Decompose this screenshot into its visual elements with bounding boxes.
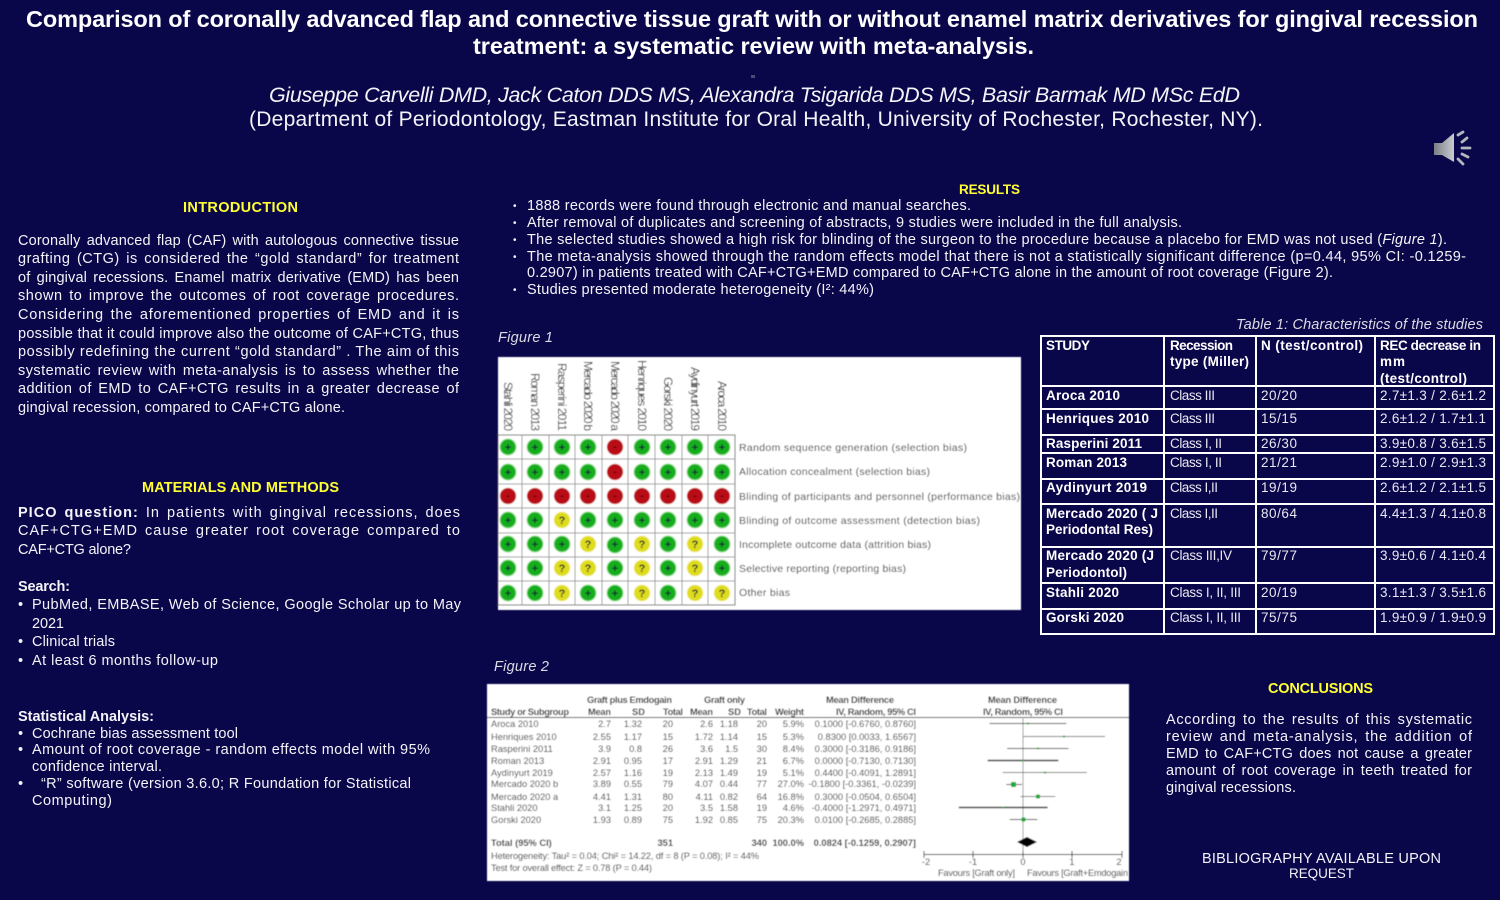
bias domain labels: Random sequence generation (selection bias) — [739, 442, 967, 454]
text block: introduction body: of gingival recessions. Enamel matrix derivative (EMD) has been — [18, 270, 459, 286]
forest plot study rows: 4.07 — [695, 779, 713, 789]
forest plot graphic: 2 — [1116, 857, 1122, 867]
text block: statistical analysis: Amount of root coverage - random effects model with 95% — [32, 742, 430, 758]
forest plot study rows: 2.7 — [598, 719, 611, 729]
forest plot study rows: 5.3% — [783, 732, 804, 742]
forest plot total row: Heterogeneity: Tau² = 0.04; Chi² = 14.22, df = 8 (P = 0.08); I² = 44% — [491, 851, 759, 861]
forest plot study rows: 19 — [663, 768, 673, 778]
risk of bias dots: ??? — [585, 539, 699, 551]
study column labels: Aydinyurt 2019 — [688, 367, 702, 431]
table column: study: Rasperini 2011 — [1046, 436, 1142, 451]
table column: REC decrease: 3.9±0.8 / 3.6±1.5 — [1380, 436, 1486, 451]
forest plot study rows: Mercado 2020 a — [491, 792, 559, 802]
forest plot study rows: 21 — [757, 756, 767, 766]
table column: study: Roman 2013 — [1046, 455, 1127, 470]
text block: introduction body: addition of EMD to CAF+CTG results in a greater decrease of — [18, 381, 460, 397]
text block: statistical analysis — [18, 709, 430, 809]
forest plot study rows: 2.91 — [695, 756, 713, 766]
text block: results bullets: Studies presented moderate heterogeneity (I²: 44%) — [527, 282, 874, 298]
risk of bias dots: ???? — [559, 588, 726, 600]
forest plot study rows: 1.31 — [624, 792, 642, 802]
text block: introduction body: grafting (CTG) is considered the “gold standard” for treatment — [18, 251, 459, 267]
forest plot study rows: 1.58 — [720, 803, 738, 813]
forest plot table headers: IV, Random, 95% CI — [836, 707, 916, 717]
forest plot table headers: Graft only — [704, 695, 746, 705]
risk of bias dots — [500, 439, 730, 601]
forest plot study rows: 0.44 — [720, 779, 738, 789]
text block: conclusions body: amount of root coverage in teeth treated for — [1166, 763, 1472, 779]
text block: results bullets: 1888 records were found through electronic and manual searches. — [527, 198, 971, 214]
forest plot study rows: 0.1000 [-0.6760, 0.8760] — [815, 719, 916, 729]
bibliography note: BIBLIOGRAPHY AVAILABLE UPON — [1202, 851, 1441, 867]
text block: results bullets: • — [513, 285, 517, 296]
forest plot total row: Test for overall effect: Z = 0.78 (P = 0.44) — [491, 863, 652, 873]
forest plot study rows: 4.41 — [593, 792, 611, 802]
forest plot study rows: 0.8 — [629, 744, 642, 754]
study column labels: Gorski 2020 — [661, 377, 675, 431]
text block: statistical analysis: • — [18, 776, 23, 792]
table column: REC decrease — [1380, 338, 1486, 625]
forest plot study rows: 2.6 — [700, 719, 713, 729]
forest plot study rows: 27.0% — [778, 779, 804, 789]
table column: recession type — [1170, 338, 1249, 625]
forest plot table headers: Mean — [690, 707, 713, 717]
forest plot study rows: Henriques 2010 — [491, 732, 557, 742]
forest plot study rows: 0.0000 [-0.7130, 0.7130] — [815, 756, 916, 766]
table column: REC decrease: 2.6±1.2 / 2.1±1.5 — [1380, 480, 1486, 495]
bias domain labels — [739, 442, 1020, 599]
forest plot study rows: 20 — [757, 719, 767, 729]
text block: introduction body: systematic review with meta-analysis is to assess whether the — [18, 363, 459, 379]
forest plot study rows: 0.8300 [0.0033, 1.6567] — [818, 732, 916, 742]
bias domain labels: Blinding of outcome assessment (detection bias) — [739, 515, 980, 527]
table column: recession type: Class III — [1170, 388, 1215, 403]
text block: PICO question: CAF+CTG alone? — [18, 542, 131, 558]
forest plot total row: 340 — [751, 838, 767, 848]
study column labels: Rasperini 2011 — [555, 363, 569, 431]
risk of bias dots: ++++++ — [505, 539, 725, 551]
text block: conclusions body: According to the results of this systematic — [1166, 712, 1472, 728]
text block: statistical analysis: “R” software (version 3.6.0; R Foundation for Statistical — [41, 776, 411, 792]
chart: forest plot — [487, 684, 1129, 881]
text block: conclusions body — [1166, 712, 1473, 796]
forest plot study rows: 0.3000 [-0.0504, 0.6504] — [815, 792, 916, 802]
table column: N: 15/15 — [1261, 411, 1297, 426]
forest plot study rows: 3.1 — [598, 803, 611, 813]
study column labels: Mercado 2020 b — [581, 361, 595, 431]
forest plot total row: Total (95% CI) — [491, 838, 552, 848]
bias domain labels: Blinding of participants and personnel (performance bias) — [739, 491, 1020, 503]
forest plot study rows: 20.3% — [778, 815, 804, 825]
text block: introduction body: gingival recession, compared to CAF+CTG alone. — [18, 400, 345, 416]
forest plot study rows: 1.16 — [624, 768, 642, 778]
table column: REC decrease: 3.9±0.6 / 4.1±0.4 — [1380, 548, 1486, 563]
forest plot study rows: 3.9 — [598, 744, 611, 754]
text block: PICO question: PICO question: In patients with gingival recessions, does — [18, 505, 460, 521]
table column: N: N (test/control) — [1261, 338, 1363, 353]
table column: N — [1261, 338, 1363, 625]
study column labels — [501, 360, 729, 431]
forest plot study rows: 3.6 — [700, 744, 713, 754]
table column: N: 75/75 — [1261, 610, 1297, 625]
forest plot total row — [491, 838, 916, 873]
forest plot study rows: 0.85 — [720, 815, 738, 825]
forest plot study rows: Rasperini 2011 — [491, 744, 553, 754]
forest plot study rows: Roman 2013 — [491, 756, 544, 766]
risk of bias dots: ++++++++ — [505, 515, 725, 527]
text block: PICO question — [18, 505, 460, 558]
title — [26, 6, 1478, 59]
text block: PICO question: CAF+CTG+EMD cause greater root coverage compared to — [18, 523, 460, 539]
table column: recession type: Recession — [1170, 338, 1233, 353]
panel: introduction — [18, 200, 460, 416]
forest plot study rows: 3.5 — [700, 803, 713, 813]
text block: results bullets: The meta-analysis showed through the random effects model that there is not a statistically significant difference (p=0.44, 95% CI: -0.1259- — [527, 249, 1466, 265]
forest plot study rows: 75 — [757, 815, 767, 825]
table column: study: Stahli 2020 — [1046, 585, 1119, 600]
forest plot study rows: 20 — [663, 803, 673, 813]
text block: search: PubMed, EMBASE, Web of Science, Google Scholar up to May — [32, 597, 462, 613]
table column: REC decrease: REC decrease in — [1380, 338, 1481, 353]
text block: search: Search: — [18, 579, 70, 595]
panel: conclusions — [1166, 681, 1473, 796]
table column: study: STUDY — [1046, 338, 1090, 353]
table column: study: Mercado 2020 (J — [1046, 548, 1154, 563]
table column: recession type: Class I, II, III — [1170, 585, 1241, 600]
forest plot study rows: 75 — [663, 815, 673, 825]
text block: introduction body: possibly redefining the current “gold standard” . The aim of this — [18, 344, 459, 360]
forest plot study rows: 1.14 — [720, 732, 738, 742]
table column: study: Henriques 2010 — [1046, 411, 1149, 426]
table column: REC decrease: 4.4±1.3 / 4.1±0.8 — [1380, 506, 1486, 521]
risk of bias dots: +++++ — [505, 588, 671, 600]
forest plot study rows: 79 — [663, 779, 673, 789]
forest plot study rows: 6.7% — [783, 756, 804, 766]
forest plot study rows: 1.25 — [624, 803, 642, 813]
text block: statistical analysis: Cochrane bias assessment tool — [32, 726, 238, 742]
forest plot graphic: 0 — [1020, 857, 1026, 867]
affiliation: (Department of Periodontology, Eastman Institute for Oral Health, University of Rochester, Rochester, NY). — [249, 108, 1263, 131]
risk of bias dots: ? — [559, 515, 566, 527]
study column labels: Mercado 2020 a — [608, 361, 622, 431]
forest plot study rows: 1.18 — [720, 719, 738, 729]
forest plot study rows: -0.1800 [-0.3361, -0.0239] — [808, 779, 916, 789]
forest plot graphic: -1 — [969, 857, 977, 867]
forest plot study rows: 16.8% — [778, 792, 804, 802]
forest plot study rows: 2.91 — [593, 756, 611, 766]
forest plot study rows: 1.93 — [593, 815, 611, 825]
table column: study: Mercado 2020 ( J — [1046, 506, 1158, 521]
forest plot study rows: 1.17 — [624, 732, 642, 742]
text block: results bullets — [513, 198, 1466, 298]
bias domain labels: Incomplete outcome data (attrition bias) — [739, 539, 931, 551]
forest plot table headers: Study or Subgroup — [491, 707, 569, 717]
forest plot study rows: 1.49 — [720, 768, 738, 778]
text block: results bullets: The selected studies showed a high risk for blinding of the surgeon to the procedure because a placebo for EMD was not used (Figure 1). — [527, 232, 1447, 248]
table column: study — [1046, 338, 1158, 625]
forest plot table headers: SD — [728, 707, 741, 717]
forest plot study rows: 17 — [663, 756, 673, 766]
text block: introduction body — [18, 233, 460, 416]
text block: results bullets: 0.2907) in patients treated with CAF+CTG+EMD compared to CAF+CTG alone in the amount of root coverage (Figure 2). — [527, 265, 1333, 281]
forest plot study rows: 0.4400 [-0.4091, 1.2891] — [815, 768, 916, 778]
heading: results: RESULTS — [959, 182, 1020, 197]
forest plot study rows: 80 — [663, 792, 673, 802]
panel: results — [513, 182, 1466, 298]
forest plot study rows: Stahli 2020 — [491, 803, 538, 813]
panel: materials and methods — [18, 480, 462, 809]
text block: statistical analysis: • — [18, 726, 23, 742]
chart: risk of bias figure — [498, 357, 1021, 610]
forest plot study rows — [491, 719, 916, 825]
text block: results bullets: After removal of duplicates and screening of abstracts, 9 studies were included in the full analysis. — [527, 215, 1182, 231]
study column labels: Roman 2013 — [528, 373, 542, 431]
forest plot study rows: 3.89 — [593, 779, 611, 789]
text block: search: 2021 — [32, 616, 64, 632]
text block: statistical analysis: • — [18, 742, 23, 758]
text block: introduction body: shown to improve the outcomes of root coverage procedures. — [18, 288, 459, 304]
study column labels: Aroca 2010 — [715, 381, 729, 431]
table column: study: Periodontol) — [1046, 565, 1127, 580]
table column: recession type: Class I,II — [1170, 480, 1218, 495]
forest plot table headers: Graft plus Emdogain — [587, 695, 672, 705]
forest plot study rows: 26 — [663, 744, 673, 754]
table column: study: Gorski 2020 — [1046, 610, 1124, 625]
forest plot table headers: Total — [663, 707, 683, 717]
study column labels: Stahli 2020 — [501, 382, 515, 431]
risk of bias dots: +++++ — [505, 563, 725, 575]
forest plot study rows: 77 — [757, 779, 767, 789]
forest plot study rows: 5.9% — [783, 719, 804, 729]
text block: statistical analysis: Computing) — [32, 793, 112, 809]
table grid — [1041, 336, 1494, 634]
table column: recession type: Class I,II — [1170, 506, 1218, 521]
text block: statistical analysis: confidence interval. — [32, 759, 162, 775]
text block: search: • — [18, 653, 23, 669]
table column: REC decrease: mm — [1380, 354, 1405, 369]
text block: introduction body: Coronally advanced flap (CAF) with autologous connective tissue — [18, 233, 459, 249]
table column: REC decrease: 2.9±1.0 / 2.9±1.3 — [1380, 455, 1486, 470]
risk of bias dots: ???? — [559, 563, 699, 575]
authors: Giuseppe Carvelli DMD, Jack Caton DDS MS, Alexandra Tsigarida DDS MS, Basir Barmak MD MSc EdD — [269, 83, 1240, 107]
forest plot table headers: Total — [747, 707, 767, 717]
text block: conclusions body: EMD to CAF+CTG does not cause a greater — [1166, 746, 1472, 762]
forest plot study rows: 1.5 — [725, 744, 738, 754]
forest plot graphic: Favours [Graft+Emdogain — [1027, 868, 1128, 878]
forest plot graphic: 1 — [1069, 857, 1075, 867]
text block: results bullets: • — [513, 252, 517, 263]
heading: conclusions: CONCLUSIONS — [1268, 681, 1373, 697]
table column: study: Aydinyurt 2019 — [1046, 480, 1147, 495]
text block: results bullets: • — [513, 235, 517, 246]
text block: conclusions body: gingival recessions. — [1166, 780, 1296, 796]
forest plot study rows: Aydinyurt 2019 — [491, 768, 553, 778]
table column: REC decrease: 2.6±1.2 / 1.7±1.1 — [1380, 411, 1486, 426]
title: treatment: a systematic review with meta-analysis. — [473, 33, 1034, 59]
bibliography note — [1202, 851, 1441, 881]
risk of bias dots: - — [613, 441, 617, 453]
table column: N: 20/20 — [1261, 388, 1297, 403]
table column: N: 19/19 — [1261, 480, 1297, 495]
forest plot graphic: Favours [Graft only] — [938, 868, 1015, 878]
forest plot study rows: 0.3000 [-0.3186, 0.9186] — [815, 744, 916, 754]
table column: study: Periodontal Res) — [1046, 522, 1153, 537]
forest plot table headers: SD — [632, 707, 645, 717]
risk of bias dots: ++++++++ — [505, 467, 725, 479]
risk of bias dots: - — [613, 466, 617, 478]
forest plot total row: 100.0% — [772, 838, 805, 848]
forest plot total row: 0.0824 [-0.1259, 0.2907] — [814, 838, 916, 848]
forest plot study rows: Mercado 2020 b — [491, 779, 558, 789]
title: Comparison of coronally advanced flap and connective tissue graft with or without enamel matrix derivatives for gingival recession — [26, 6, 1478, 32]
bias domain labels: Selective reporting (reporting bias) — [739, 563, 906, 575]
forest plot study rows: 2.55 — [593, 732, 611, 742]
forest plot study rows: -0.4000 [-1.2971, 0.4971] — [812, 803, 916, 813]
forest plot study rows: 64 — [757, 792, 767, 802]
text block: search: At least 6 months follow-up — [32, 653, 218, 669]
forest plot study rows: 0.55 — [624, 779, 642, 789]
risk of bias dots: --------- — [506, 490, 724, 502]
forest plot study rows: 2.57 — [593, 768, 611, 778]
caption: table 1: Table 1: Characteristics of the studies — [1236, 317, 1483, 333]
forest plot study rows: 8.4% — [783, 744, 804, 754]
table column: recession type: Class III,IV — [1170, 548, 1232, 563]
forest plot study rows: 1.32 — [624, 719, 642, 729]
forest plot study rows: 4.6% — [783, 803, 804, 813]
forest plot study rows: 1.72 — [695, 732, 713, 742]
text block: introduction body: possible that it could improve also the outcome of CAF+CTG, thus — [18, 326, 459, 342]
forest plot table headers: Mean — [588, 707, 611, 717]
table column: REC decrease: 2.7±1.3 / 2.6±1.2 — [1380, 388, 1486, 403]
text block: statistical analysis: Statistical Analysis: — [18, 709, 154, 725]
text block: introduction body: Considering the aforementioned properties of EMD and it is — [18, 307, 459, 323]
forest plot study rows: 0.0100 [-0.2685, 0.2885] — [815, 815, 916, 825]
forest plot study rows: Gorski 2020 — [491, 815, 541, 825]
table column: recession type: Class III — [1170, 411, 1215, 426]
forest plot table headers — [487, 695, 1129, 718]
table column: REC decrease: 3.1±1.3 / 3.5±1.6 — [1380, 585, 1486, 600]
table column: study: Aroca 2010 — [1046, 388, 1120, 403]
caption: figure 2: Figure 2 — [494, 659, 549, 675]
forest plot table headers: Mean Difference — [826, 695, 894, 705]
bibliography note: REQUEST — [1289, 866, 1354, 881]
forest plot study rows: 19 — [757, 803, 767, 813]
heading: materials and methods: MATERIALS AND METHODS — [142, 480, 339, 496]
table column: recession type: Class I, II — [1170, 436, 1222, 451]
table column: REC decrease: (test/control) — [1380, 371, 1467, 386]
table column: N: 80/64 — [1261, 506, 1297, 521]
caption: figure 1: Figure 1 — [498, 330, 553, 346]
forest plot study rows: 1.29 — [720, 756, 738, 766]
text block: results bullets: • — [513, 218, 517, 229]
forest plot study rows: 4.11 — [696, 792, 713, 802]
table column: recession type: Class I, II, III — [1170, 610, 1241, 625]
forest plot study rows: 0.89 — [624, 815, 642, 825]
forest plot graphic: -2 — [922, 857, 930, 867]
text block: conclusions body: review and meta-analysis, the addition of — [1166, 729, 1473, 745]
forest plot study rows: 0.95 — [624, 756, 642, 766]
forest plot study rows: 20 — [663, 719, 673, 729]
forest plot study rows: 15 — [663, 732, 673, 742]
forest plot study rows: 0.82 — [720, 792, 738, 802]
forest plot study rows: 2.13 — [695, 768, 713, 778]
forest plot table headers: Weight — [775, 707, 804, 717]
forest plot study rows: 30 — [757, 744, 767, 754]
forest plot graphic — [922, 717, 1128, 878]
bias domain labels: Other bias — [739, 587, 790, 599]
table column: N: 79/77 — [1261, 548, 1297, 563]
heading: introduction: INTRODUCTION — [183, 200, 298, 216]
forest plot study rows: 19 — [757, 768, 767, 778]
text block: search: • — [18, 597, 23, 613]
forest plot table headers: Mean Difference — [988, 695, 1057, 705]
text block: search: Clinical trials — [32, 634, 115, 650]
forest plot total row: 351 — [657, 838, 673, 848]
text block: search: • — [18, 634, 23, 650]
table column: N: 20/19 — [1261, 585, 1297, 600]
text block: results bullets: • — [513, 201, 517, 212]
risk of bias dots: ++++++++ — [505, 442, 725, 454]
table column: REC decrease: 1.9±0.9 / 1.9±0.9 — [1380, 610, 1486, 625]
table: characteristics of the studies — [1041, 336, 1494, 634]
bias domain labels: Allocation concealment (selection bias) — [739, 466, 930, 478]
table column: recession type: type (Miller) — [1170, 354, 1249, 369]
forest plot table headers: IV, Random, 95% CI — [983, 707, 1063, 717]
icon: speaker — [1434, 132, 1470, 164]
grid lines — [498, 435, 735, 605]
forest plot study rows: Aroca 2010 — [491, 719, 539, 729]
study column labels: Henriques 2010 — [635, 360, 649, 431]
forest plot study rows: 1.92 — [695, 815, 713, 825]
table column: N: 26/30 — [1261, 436, 1297, 451]
forest plot study rows: 15 — [757, 732, 767, 742]
table column: N: 21/21 — [1261, 455, 1297, 470]
text block: search — [18, 579, 462, 669]
table column: recession type: Class I, II — [1170, 455, 1222, 470]
forest plot study rows: 5.1% — [783, 768, 804, 778]
